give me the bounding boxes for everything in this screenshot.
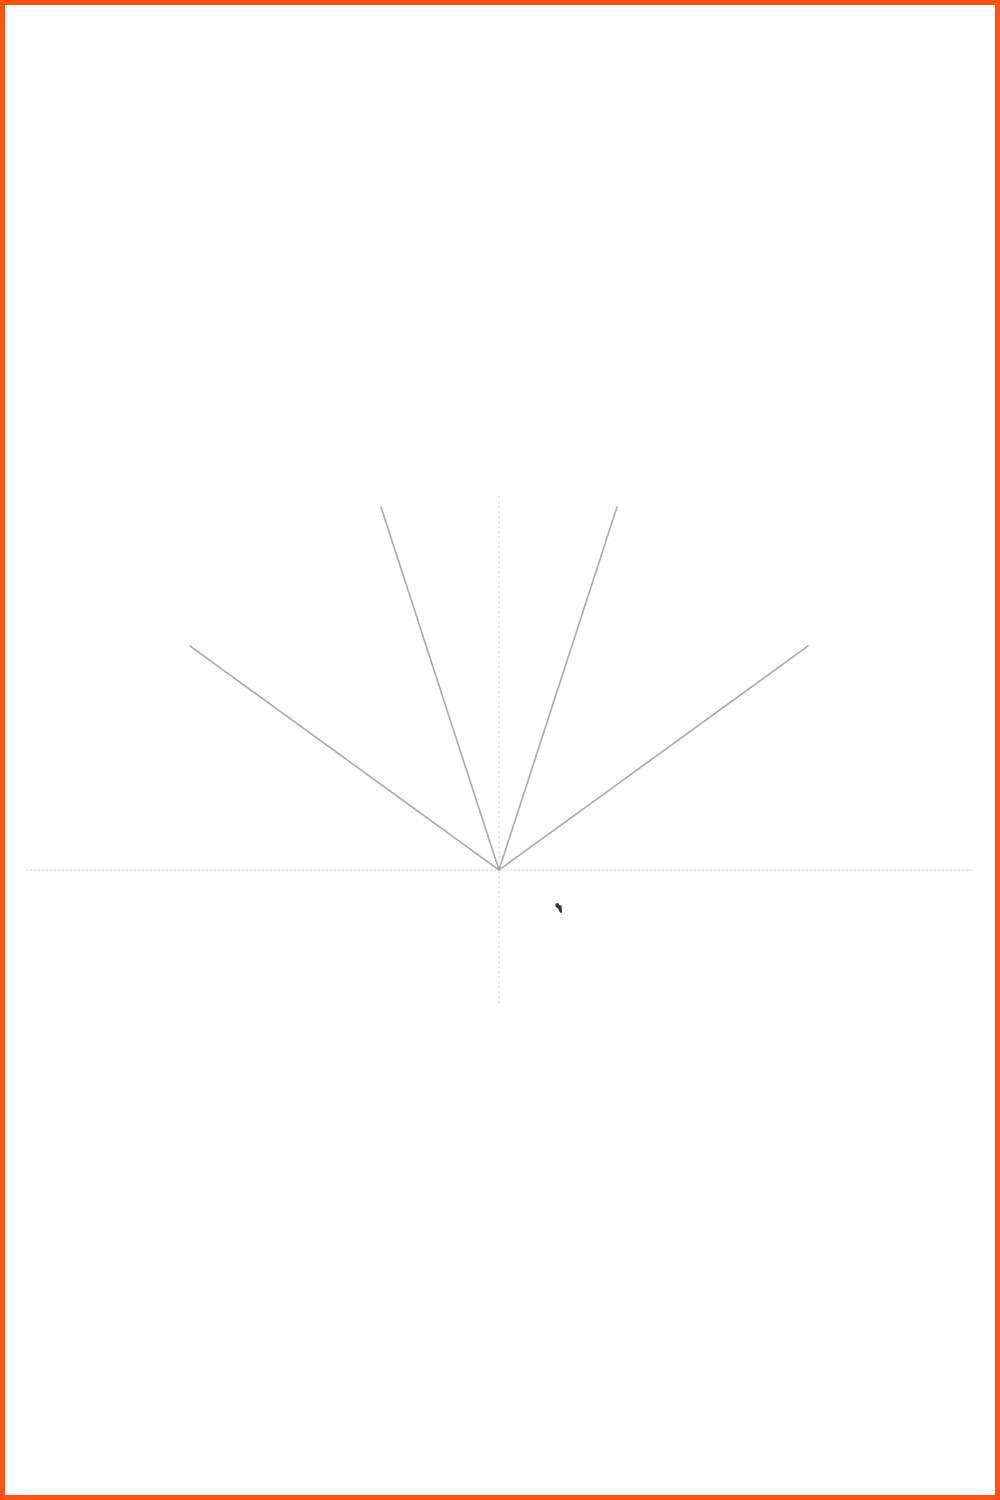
icon: cursor mark [556, 903, 562, 913]
radial spokes [190, 507, 808, 870]
vertical dotted axis [498, 496, 500, 1004]
horizontal dotted axis [26, 869, 974, 871]
